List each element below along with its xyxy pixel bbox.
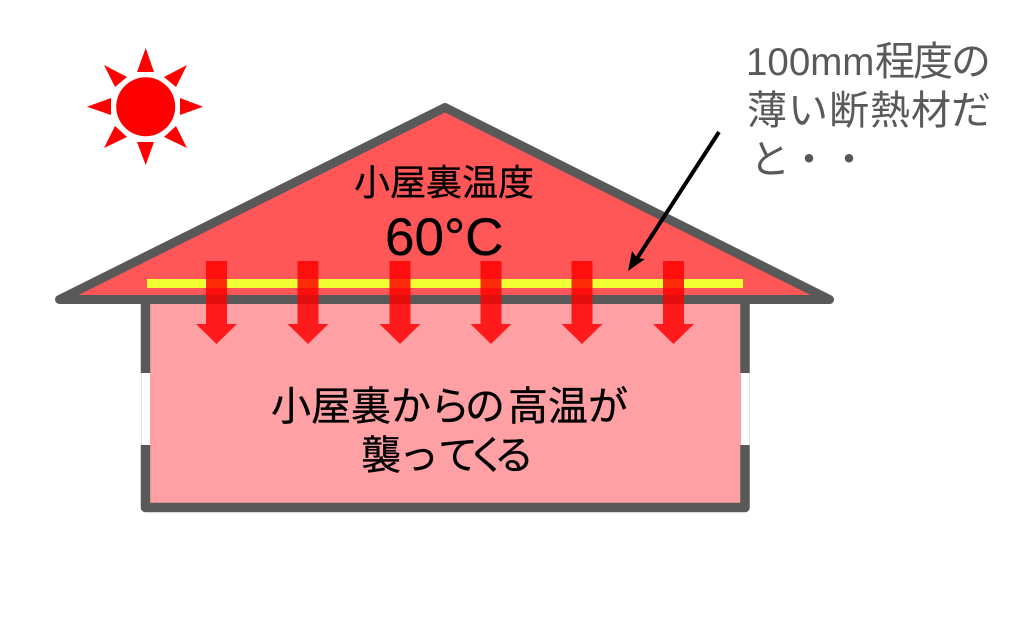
callout text: 100mm (746, 41, 874, 84)
panel: attic roof (60, 108, 830, 300)
room label (271, 374, 628, 481)
attic label: 小屋裏温度 (354, 154, 534, 206)
panel: house room (142, 299, 750, 508)
attic label (354, 154, 534, 267)
callout text: 薄い断熱材だ (747, 78, 991, 136)
callout arrow (628, 132, 719, 271)
room label: 襲ってくる (361, 423, 534, 481)
room label: 小屋裏からの高温が (271, 374, 628, 432)
callout text: 程度の (875, 29, 991, 87)
callout text: と・・ (750, 127, 869, 185)
insulation layer (147, 279, 743, 288)
heat arrows (196, 261, 694, 344)
attic label: 60°C (385, 208, 503, 267)
icon: sun (87, 48, 203, 165)
callout text (746, 29, 991, 185)
